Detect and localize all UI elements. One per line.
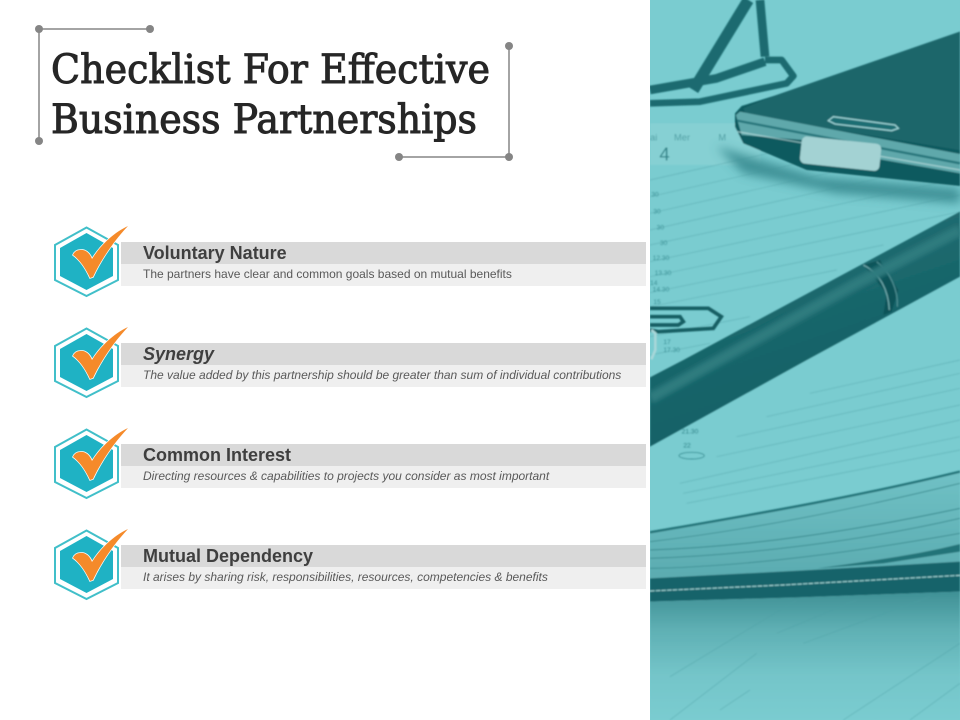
notebook header strip xyxy=(650,123,760,165)
panel: synergy: Synergy xyxy=(143,344,214,364)
notebook ruled lines and hour labels: 30 xyxy=(651,192,659,199)
title xyxy=(51,47,490,143)
binder ring xyxy=(651,330,655,359)
notebook ruled lines and hour labels: 30 xyxy=(657,224,664,231)
panel: mutual dependency xyxy=(121,545,646,589)
notebook ruled lines and hour labels: 14 xyxy=(650,280,658,287)
notebook header strip: Mer xyxy=(674,133,690,143)
notebook ruled lines and hour labels: 13.30 xyxy=(655,270,672,277)
panel: synergy xyxy=(121,343,646,387)
book cover xyxy=(650,562,960,602)
notebook header strip: ai xyxy=(650,133,657,143)
notebook ruled lines and hour labels: 15 xyxy=(653,299,661,306)
panel: mutual dependency: Mutual Dependency xyxy=(143,546,313,566)
notebook ruled lines and hour labels xyxy=(650,110,960,503)
notebook header strip: M xyxy=(718,133,726,143)
notebook ruled lines and hour labels: 30 xyxy=(653,208,661,215)
phone shadow xyxy=(717,147,960,203)
panel: common interest: Directing resources & capabilities to projects you consider as most important xyxy=(143,469,549,483)
book page edges xyxy=(650,472,960,578)
panel: synergy: The value added by this partnership should be greater than sum of individual contributions xyxy=(143,368,621,382)
icon: check badge 4 xyxy=(55,529,128,599)
panel: common interest xyxy=(121,444,646,488)
notebook ruled lines and hour labels: 12.30 xyxy=(653,255,670,262)
wooden table xyxy=(650,592,960,720)
panel: voluntary nature xyxy=(121,242,646,286)
phone xyxy=(735,32,960,186)
notebook ruled lines and hour labels: 17.30 xyxy=(663,347,680,354)
icon: check badge 1 xyxy=(55,226,128,296)
title frame xyxy=(35,25,513,161)
pen xyxy=(650,212,960,447)
notebook header strip: 4 xyxy=(659,144,670,165)
notebook ruled lines and hour labels: 21.30 xyxy=(682,428,699,435)
notebook ruled lines and hour labels: 17 xyxy=(663,339,671,346)
notebook ruled lines and hour labels: 22 xyxy=(683,442,691,449)
title: Business Partnerships xyxy=(51,97,477,143)
notebook ruled lines and hour labels: 14.30 xyxy=(653,287,670,294)
panel: mutual dependency: It arises by sharing risk, responsibilities, resources, competencies & benefits xyxy=(143,570,548,584)
notebook ruled lines and hour labels: 30 xyxy=(660,240,668,247)
panel: voluntary nature: Voluntary Nature xyxy=(143,243,287,263)
panel: teal duotone desk photo xyxy=(650,0,960,720)
panel: voluntary nature: The partners have clear and common goals based on mutual benefits xyxy=(143,267,512,281)
icon: check badge 3 xyxy=(55,428,128,498)
glasses xyxy=(650,0,793,103)
paper clip xyxy=(650,308,721,332)
title: Checklist For Effective xyxy=(51,47,490,93)
icon: check badge 2 xyxy=(55,327,128,397)
panel: common interest: Common Interest xyxy=(143,445,291,465)
